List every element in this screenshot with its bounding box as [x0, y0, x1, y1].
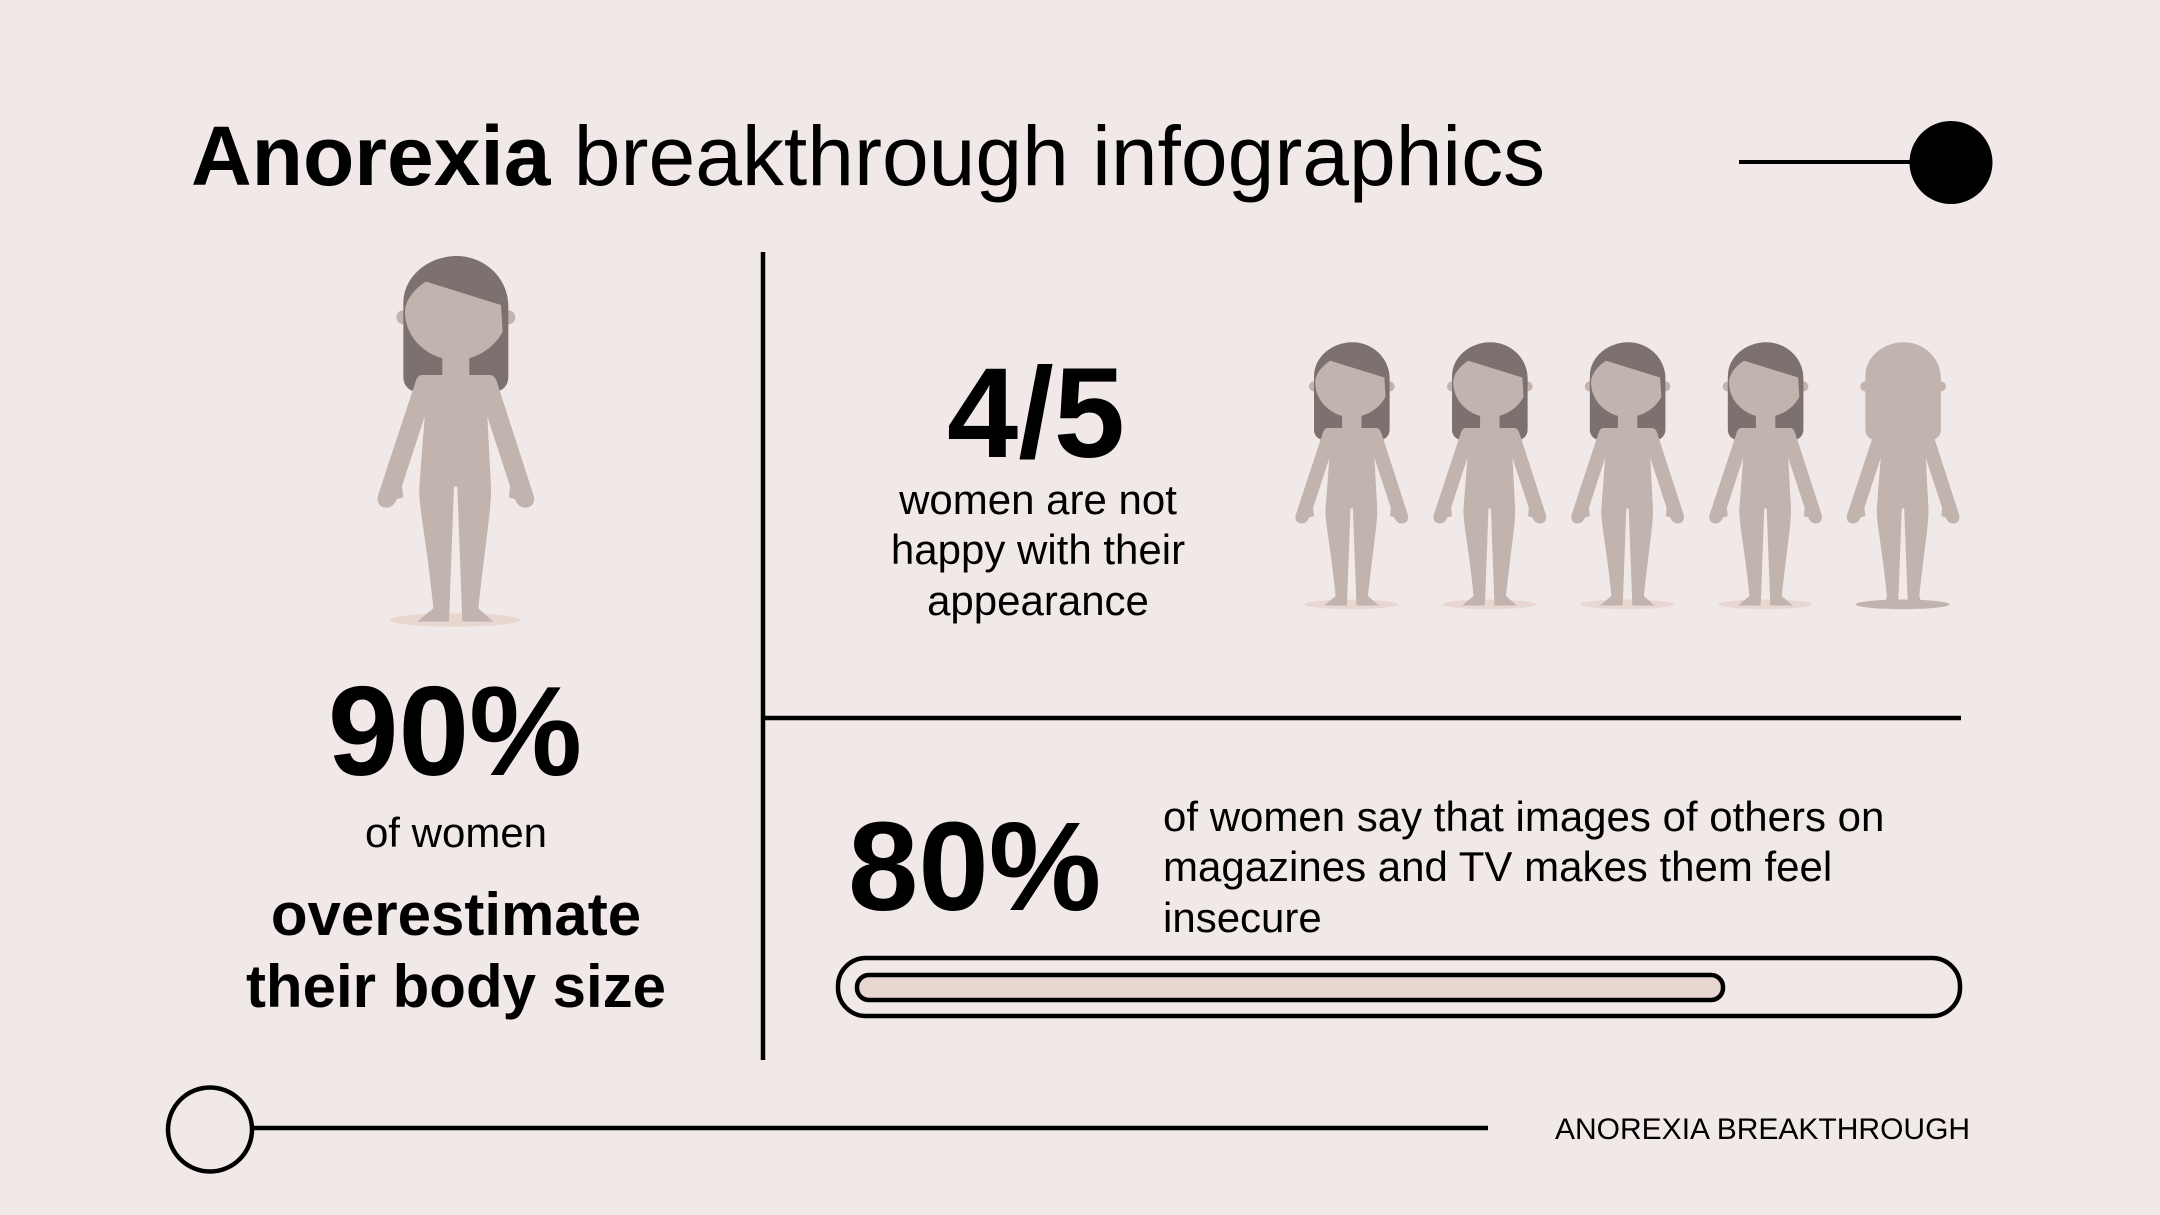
text: images of others — [1163, 793, 1884, 941]
icon row: five women — [1295, 342, 1959, 609]
text: of women: of women — [365, 809, 547, 856]
icon: woman 4 — [1709, 342, 1822, 609]
progress bar fill — [857, 975, 1723, 1000]
title: Anorexia breakthrough infographics — [191, 109, 1545, 203]
text: women are not happy — [891, 476, 1185, 624]
stat: 90%: 90% — [328, 660, 582, 802]
vertical divider — [761, 252, 765, 1060]
text: women are not happy: happy with their — [891, 526, 1185, 573]
bottom line and ring — [168, 1088, 1488, 1172]
icon: large woman figure — [378, 256, 534, 627]
icon: woman 1 — [1295, 342, 1408, 609]
icon: woman 2 — [1433, 342, 1546, 609]
text: images of others: of women say that images of others on — [1163, 793, 1884, 840]
text: women are not happy: women are not — [898, 476, 1177, 523]
icon: woman 5 silhouette — [1847, 342, 1959, 609]
text: overestimate their body size: overestimate — [271, 881, 641, 948]
text: overestimate their body size: their body size — [246, 953, 666, 1020]
horizontal divider — [763, 716, 1961, 720]
top right line and dot — [1739, 121, 1992, 204]
stat: 4/5: 4/5 — [947, 342, 1125, 485]
progress bar — [838, 958, 1960, 1016]
text: images of others: insecure — [1163, 894, 1322, 941]
footer text: ANOREXIA BREAKTHROUGH — [1555, 1113, 1970, 1146]
text: images of others: magazines and TV makes them feel — [1163, 843, 1832, 890]
icon: woman 3 — [1571, 342, 1684, 609]
text: women are not happy: appearance — [927, 577, 1149, 624]
text: overestimate their body size — [246, 881, 666, 1020]
stat: 80%: 80% — [848, 795, 1101, 937]
